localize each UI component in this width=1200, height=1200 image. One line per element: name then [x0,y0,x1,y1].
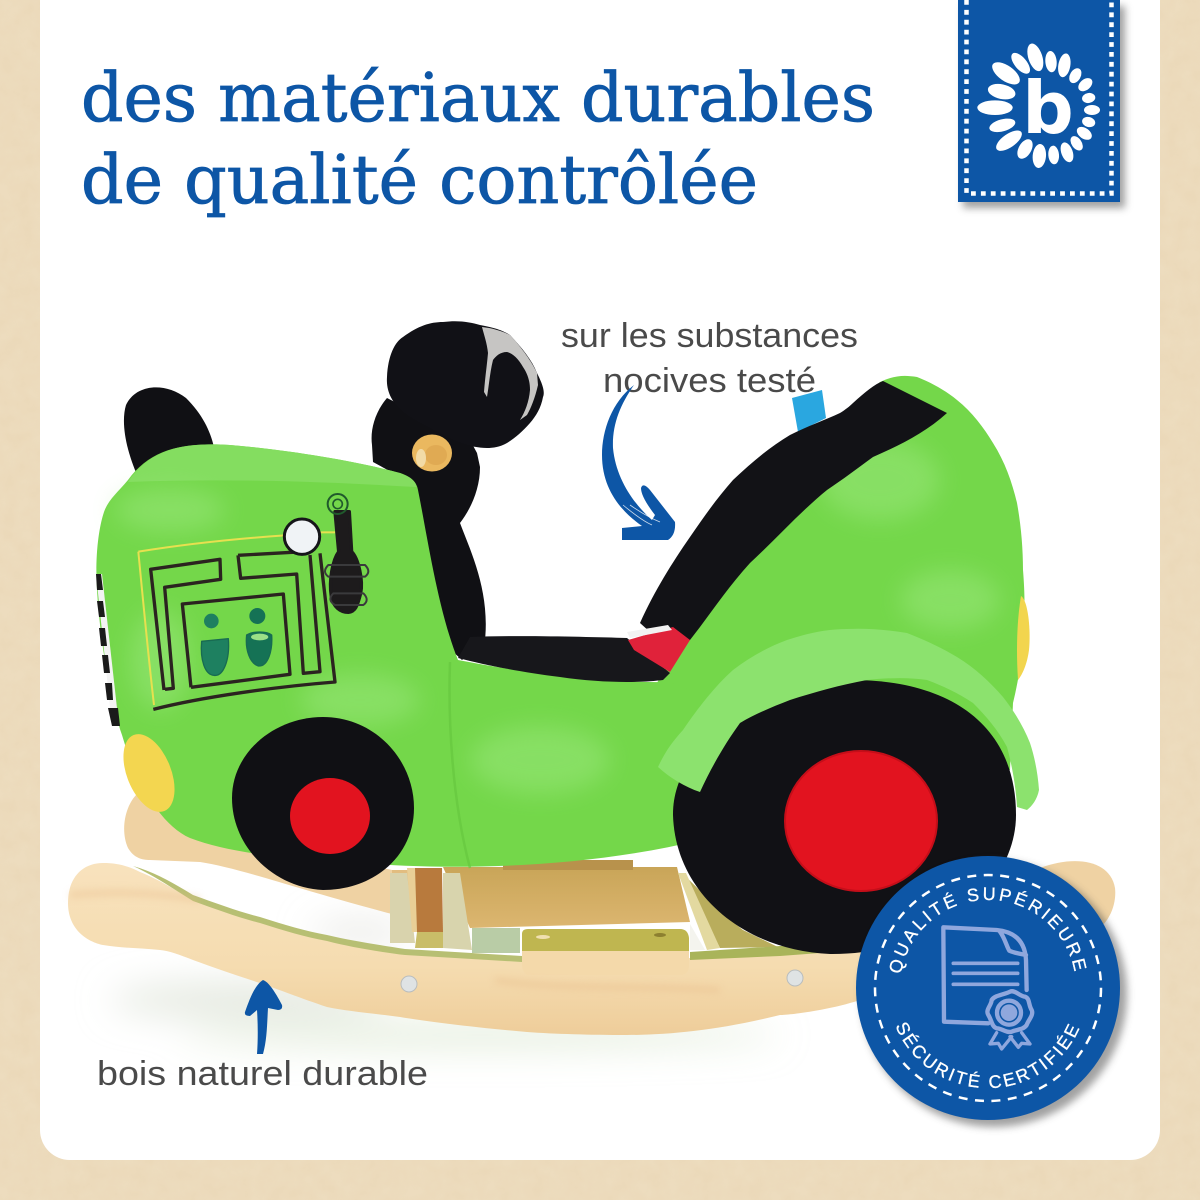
seat pad [458,636,670,682]
rocker top band [133,866,522,962]
fender [658,629,1039,810]
rear shell [650,376,1024,790]
label: substances: nocives testé [603,362,816,400]
backrest [640,381,947,650]
embroidered engine panel [138,494,368,709]
slats [390,873,415,943]
seat belt [627,625,690,672]
badge text: SÉCURITÉ CERTIFIÉE [896,1022,1080,1088]
plush texture patches [115,440,1000,794]
steering head [387,321,544,448]
logo letter: b [1022,66,1074,150]
near rocker [68,863,1000,1035]
main body [96,444,720,867]
title: de qualité contrôlée [81,141,758,219]
large rear wheel [673,680,1016,954]
label: substances: sur les substances [561,317,858,355]
wooden knob [412,434,452,472]
exhaust ear [124,387,214,477]
logo tag [958,0,1125,208]
arrow: to seat [602,385,675,540]
headlight [113,727,185,819]
tractor plush toy [96,321,1039,954]
icon: certificate [943,927,1032,1049]
badge: quality seal [856,856,1132,1132]
seam [450,662,470,868]
small front wheel [232,717,414,890]
badge text [890,887,1087,1088]
grille stripes [96,574,120,726]
title: des matériaux durables [81,59,875,137]
floor shadow [110,922,780,1045]
neck [372,398,486,660]
gauge [284,519,320,554]
label: wood: bois naturel durable [97,1055,428,1093]
label: substances [561,317,858,400]
seat tag [792,390,826,432]
lever [330,512,361,612]
badge text: QUALITÉ SUPÉRIEURE [890,887,1087,973]
footrest [522,929,689,951]
steering highlight [482,327,538,420]
indicators [206,615,217,627]
under-seat board [443,867,690,928]
title [81,59,875,219]
wood grain [70,893,720,990]
body top panel [128,444,416,487]
far rocker [124,793,392,914]
icon: flower petals [977,42,1100,169]
screws [401,976,417,992]
arrow: to wood [245,980,282,1054]
rocking base [68,793,1115,1035]
rear light [1017,596,1030,680]
